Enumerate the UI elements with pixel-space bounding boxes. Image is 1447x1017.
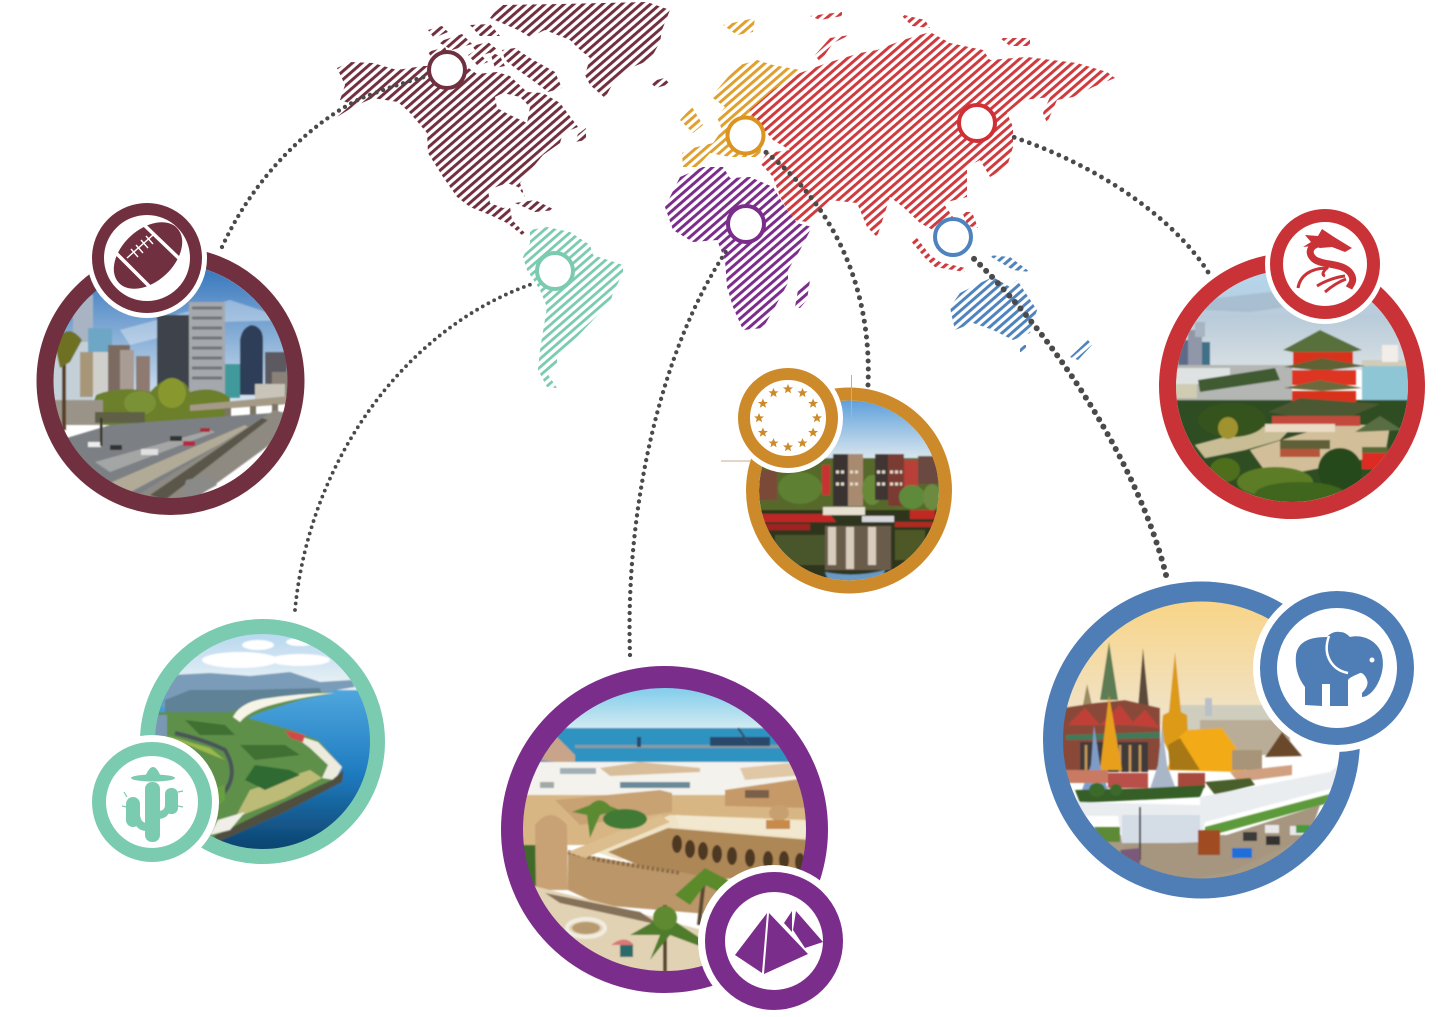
map region: Asia	[750, 12, 1115, 272]
ring	[45, 256, 296, 506]
destination: Africa	[512, 677, 850, 1017]
map marker: Europe	[728, 118, 764, 154]
map region: South America	[523, 227, 623, 388]
badge: cactus	[85, 735, 219, 869]
icon: cactus	[122, 767, 183, 842]
destination: Thailand	[1053, 584, 1421, 888]
map region: Africa	[665, 167, 812, 330]
icon: football	[101, 209, 195, 302]
badge: pyramids	[698, 865, 850, 1017]
ring	[148, 626, 378, 856]
map region: Oceania	[950, 255, 1092, 360]
dotted route: Brazil	[295, 283, 535, 610]
thin leader lines	[721, 375, 852, 461]
dotted route: Europe	[763, 150, 868, 385]
icon: pyramids	[735, 911, 823, 974]
badge: dragon	[1265, 204, 1385, 324]
photo: Amsterdam canal houses	[755, 398, 945, 585]
photo: Sousse Tunisia	[520, 685, 810, 985]
map region: Europe	[680, 18, 800, 167]
map marker: North America	[429, 52, 465, 88]
dotted route: South-East Asia	[970, 255, 1166, 575]
photo: Los Angeles skyline	[54, 270, 288, 498]
ring	[1053, 592, 1350, 888]
photo: Rio de Janeiro coast	[155, 634, 370, 849]
badge: EU stars	[733, 363, 843, 473]
ring	[512, 677, 817, 982]
destination: Brazil	[85, 626, 378, 869]
world map	[337, 2, 1115, 388]
dotted route: Africa	[630, 250, 727, 655]
icon: dragon	[1298, 229, 1353, 292]
map marker: South America	[537, 253, 573, 289]
dotted route: United States	[222, 76, 428, 247]
map marker: Africa	[728, 206, 764, 242]
map marker: Asia	[959, 105, 995, 141]
badge: elephant	[1253, 584, 1421, 752]
map marker: South-East Asia	[935, 219, 971, 255]
icon: elephant	[1296, 632, 1383, 706]
destination: Europe	[721, 363, 946, 587]
photo: Chinese pagoda	[1176, 273, 1408, 502]
ring	[752, 394, 946, 587]
photo: Bangkok Grand Palace	[1060, 600, 1345, 885]
icon: twelve stars	[754, 384, 822, 451]
ring	[1168, 262, 1416, 510]
dotted route: Asia	[1007, 135, 1208, 272]
destination: United States	[45, 198, 296, 510]
map region: North America	[337, 2, 670, 235]
destination: China	[1168, 204, 1416, 530]
badge: American football	[87, 198, 207, 318]
